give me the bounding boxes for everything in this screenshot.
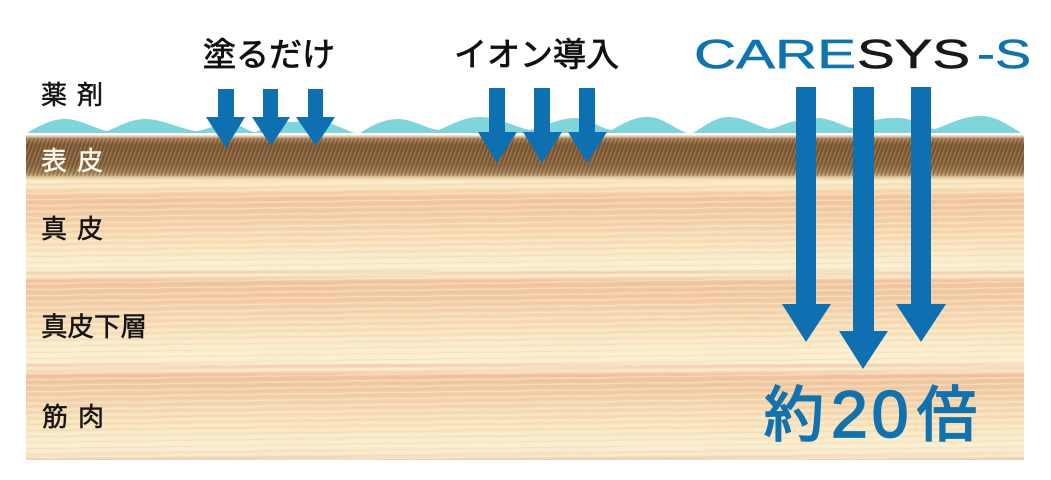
label: 筋肉: 筋肉 (42, 402, 114, 432)
callout: 約20倍: 倍 (917, 382, 977, 449)
label: 薬剤: 薬剤 (41, 80, 113, 110)
callout: 約20倍 (764, 377, 977, 451)
logo: CARESYS-S: SYS (857, 31, 970, 77)
callout: 約20倍: 20 (831, 377, 912, 451)
label: 表皮: 表皮 (41, 146, 113, 176)
skin layers (26, 135, 1024, 460)
layer: dermis, subcutis and muscle (26, 178, 1024, 460)
callout: 約20倍: 約 (764, 382, 824, 449)
layer: epidermis (26, 135, 1024, 181)
logo: CARESYS-S: CARE (694, 31, 856, 77)
arrows: CARESYS-S, deep penetration (782, 87, 946, 369)
arrows: イオン導入, medium penetration (478, 88, 607, 163)
logo: CARESYS-S: -S (977, 31, 1031, 77)
arrows: 塗るだけ, shallow penetration (206, 89, 335, 148)
logo: CARESYS-S (694, 31, 1031, 77)
heading: 塗るだけ: 塗るだけ (203, 36, 335, 73)
drug layer waves (27, 116, 1020, 133)
label: 真皮: 真皮 (41, 214, 113, 244)
heading: イオン導入: イオン導入 (454, 36, 619, 73)
label: 真皮下層: 真皮下層 (41, 312, 147, 342)
